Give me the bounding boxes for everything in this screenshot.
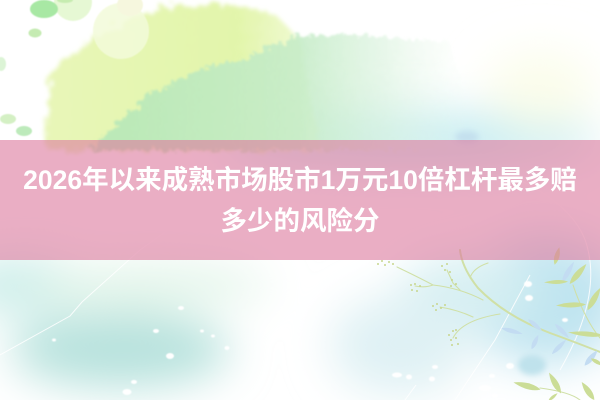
- title: 2026年以来成熟市场股市1万元10倍杠杆最多赔: [23, 165, 577, 195]
- title: 多少的风险分: [220, 206, 380, 236]
- white sparkles: [52, 281, 568, 398]
- dots top-left: [0, 0, 143, 136]
- watercolor splash: yellow-green: [46, 4, 320, 150]
- plant: main stem and branches: [397, 250, 600, 400]
- plant: seed clusters: [377, 260, 459, 346]
- plant: blue leaves: [501, 260, 600, 367]
- white thin curve lines: [0, 180, 591, 400]
- pale circle on splash: [93, 3, 149, 59]
- plant: green leaves: [513, 247, 600, 400]
- blue spot near plant: [518, 355, 546, 375]
- blue spot at band top: [455, 131, 479, 143]
- title: [23, 165, 577, 236]
- pink title band: [0, 140, 600, 260]
- watercolor splash: green: [88, 34, 480, 150]
